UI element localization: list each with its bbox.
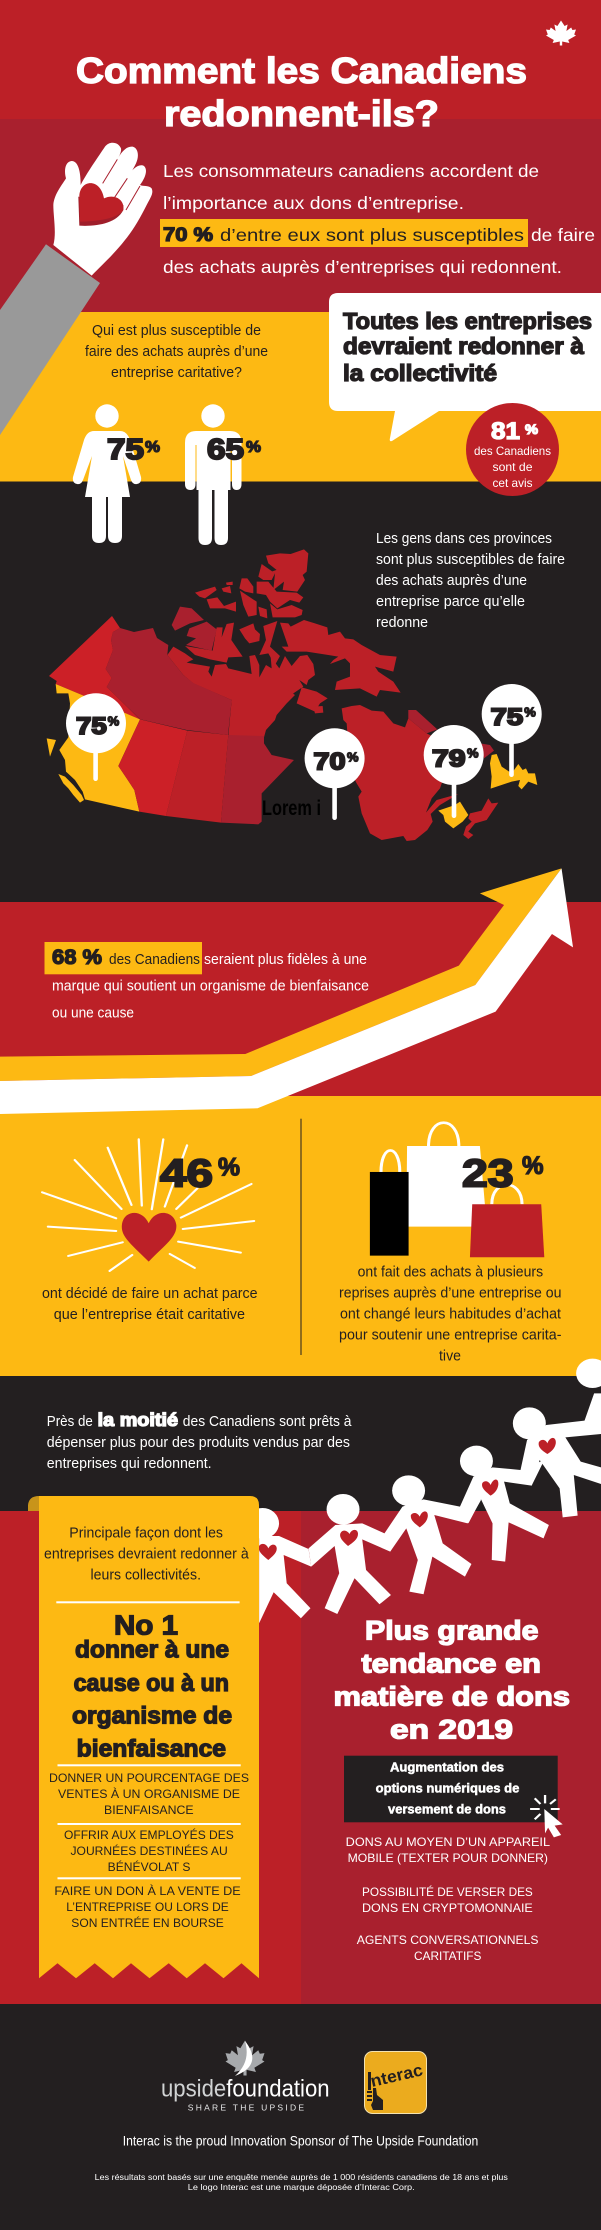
text block: la moitié: dépenser plus pour des produits vendus par des xyxy=(47,1435,350,1451)
person 6 head xyxy=(576,1359,601,1388)
stat: 23 percent: 23 xyxy=(462,1153,514,1196)
text block: intro: des achats auprès d’entreprises qui redonnent. xyxy=(163,257,562,277)
list item three: SON ENTRÉE EN BOURSE xyxy=(71,1915,224,1930)
stat: 23 percent xyxy=(462,1152,544,1196)
icon: shopping bags xyxy=(370,1123,544,1257)
text block: 46 percent description: que l’entreprise était caritative xyxy=(54,1307,245,1323)
stat: 46 percent: % xyxy=(218,1154,240,1182)
letter I and hand xyxy=(367,2072,383,2110)
callout: 81 percent circle: des Canadiens xyxy=(474,444,551,458)
label: Lorem placeholder: Lorem i xyxy=(262,797,321,820)
Nova Scotia xyxy=(463,798,498,839)
panel: red loyalty band xyxy=(0,902,601,1096)
text block: 68 percent: des Canadiens xyxy=(109,952,200,968)
panel: intro band xyxy=(0,119,601,312)
text: footnotes: Les résultats sont basés sur une enquête menée auprès de 1 000 résidents canadiens de 18 ans et plus xyxy=(95,2172,508,2182)
logo: Upside Foundation xyxy=(161,2040,330,2113)
callout: 81 percent circle xyxy=(466,403,559,496)
list item three: L’ENTREPRISE OU LORS DE xyxy=(66,1900,229,1914)
ribbon rule one xyxy=(56,1601,240,1603)
callout: digital donation options: versement de dons xyxy=(388,1802,506,1817)
panel: title band xyxy=(0,0,601,119)
text block: la moitié: la moitié xyxy=(98,1410,178,1430)
panel: dark half band xyxy=(0,1376,601,1511)
logo: Interac: nterac xyxy=(369,2060,425,2091)
text block: 23 percent description: tive xyxy=(439,1348,461,1364)
list item two: JOURNÉES DESTINÉES AU xyxy=(70,1843,228,1858)
text block: intro xyxy=(160,161,595,277)
panel: yellow stats band xyxy=(0,1096,601,1376)
title: Comment les Canadiens xyxy=(76,50,527,91)
text block: 23 percent description: pour soutenir une entreprise carita- xyxy=(339,1327,562,1343)
heading: biggest trend: tendance en xyxy=(361,1648,541,1678)
No 1 heading: cause ou à un xyxy=(74,1670,229,1697)
map pin: Maritimes 79 percent xyxy=(424,725,484,818)
panel: dark map band xyxy=(0,482,601,902)
person 1 xyxy=(246,1508,311,1623)
No 1 heading: organisme de xyxy=(72,1702,232,1729)
divider line xyxy=(300,1119,302,1355)
text block: la moitié: entreprises qui redonnent. xyxy=(47,1456,212,1472)
map pin: Maritimes 79 percent: 79 xyxy=(432,746,466,773)
map pin: Newfoundland 75 percent xyxy=(482,684,542,777)
text block: provinces: des achats auprès d’une xyxy=(376,573,527,589)
illustration: paper people chain xyxy=(246,1359,601,1623)
text block: who is more likely: faire des achats auprès d’une xyxy=(85,344,268,360)
list item two: OFFRIR AUX EMPLOYÉS DES xyxy=(64,1827,234,1842)
panel: yellow ribbon xyxy=(28,1496,259,1978)
panel: left red column xyxy=(0,1511,301,2004)
stat: women 75 percent: % xyxy=(145,439,160,456)
text block: 46 percent description: ont décidé de faire un achat parce xyxy=(42,1286,258,1302)
No 1 heading: No 1 xyxy=(114,1609,178,1640)
text: sponsor line: Interac is the proud Innovation Sponsor of The Upside Foundation xyxy=(123,2133,478,2148)
hand xyxy=(53,143,152,276)
list item two: BÉNÉVOLAT S xyxy=(108,1859,190,1874)
callout: 81 percent circle: % xyxy=(525,421,539,437)
text block: 46 percent description xyxy=(42,1286,258,1323)
callout: speech bubble: Toutes les entreprises xyxy=(343,308,592,334)
chart: map of Canada xyxy=(47,549,537,841)
text block: 68 percent: ou une cause xyxy=(52,1006,134,1022)
list item one: BIENFAISANCE xyxy=(104,1803,194,1817)
eastern provinces xyxy=(342,705,537,841)
No 1 heading: donner à une xyxy=(75,1637,229,1664)
text: footnotes xyxy=(95,2172,508,2192)
text block: provinces: Les gens dans ces provinces xyxy=(376,531,552,547)
text block: provinces: sont plus susceptibles de faire xyxy=(376,552,565,568)
text block: 23 percent description: reprises auprès d’une entreprise ou xyxy=(339,1285,562,1301)
callout: 81 percent circle: sont de xyxy=(492,460,533,474)
icon: woman figure xyxy=(73,404,141,543)
stat 68: 68 % xyxy=(52,946,102,969)
Quebec xyxy=(342,705,458,841)
ribbon intro text: Principale façon dont les xyxy=(69,1526,223,1542)
text block: who is more likely: Qui est plus susceptible de xyxy=(92,323,261,339)
Newfoundland xyxy=(490,754,537,789)
ribbon intro text: entreprises devraient redonner à xyxy=(44,1547,250,1563)
heading: biggest trend xyxy=(334,1615,570,1744)
panel: footer xyxy=(0,2004,601,2230)
icon: man figure xyxy=(185,404,242,545)
white bag xyxy=(406,1146,487,1227)
text block: trends list xyxy=(346,1835,550,1963)
text block: intro: Les consommateurs canadiens accordent de xyxy=(163,161,539,181)
south-west provinces xyxy=(47,684,294,824)
stat: men 65 percent xyxy=(207,434,261,466)
map pin: British Columbia 75 percent xyxy=(66,693,126,781)
text block: la moitié xyxy=(47,1410,352,1472)
person 4 xyxy=(460,1446,549,1562)
map pin: Ontario 70 percent: 70 xyxy=(314,748,346,775)
list item one: DONNER UN POURCENTAGE DES xyxy=(49,1771,249,1785)
text block: intro: l’importance aux dons d’entreprise. xyxy=(163,193,464,213)
ribbon intro text: leurs collectivités. xyxy=(90,1568,201,1584)
text block: intro: de faire xyxy=(531,225,595,245)
callout: speech bubble xyxy=(329,293,601,441)
Northwest Territories xyxy=(106,628,232,735)
heart xyxy=(78,197,123,226)
ribbon intro text xyxy=(44,1526,250,1584)
sleeve xyxy=(0,244,100,435)
text block: intro: d’entre eux sont plus susceptibles xyxy=(220,225,524,245)
map pin: British Columbia 75 percent: % xyxy=(108,714,120,729)
callout: digital donation options xyxy=(344,1756,558,1822)
map pin: Newfoundland 75 percent: 75 xyxy=(491,704,523,731)
map pin: Ontario 70 percent xyxy=(305,728,365,820)
stat: women 75 percent: 75 xyxy=(107,434,144,466)
New Brunswick xyxy=(438,802,468,828)
text block: trends list: CARITATIFS xyxy=(414,1949,481,1963)
list item one xyxy=(49,1771,249,1817)
heading: biggest trend: matière de dons xyxy=(334,1681,570,1711)
panel: yellow who-buys band xyxy=(0,312,601,482)
stat: 23 percent: % xyxy=(522,1152,544,1180)
person 3 xyxy=(384,1475,481,1594)
text block: provinces xyxy=(376,531,565,631)
text block: who is more likely: entreprise caritative? xyxy=(111,365,242,381)
text block: trends list: DONS EN CRYPTOMONNAIE xyxy=(362,1901,533,1915)
red bag xyxy=(492,1185,522,1204)
ribbon body xyxy=(39,1496,259,1978)
text block: 68 percent xyxy=(44,942,369,1022)
text block: 23 percent description: ont changé leurs habitudes d’achat xyxy=(340,1306,561,1322)
ribbon fold xyxy=(28,1496,39,1511)
text block: 23 percent description xyxy=(339,1265,562,1364)
black bag xyxy=(381,1150,400,1172)
text block: trends list: AGENTS CONVERSATIONNELS xyxy=(357,1933,538,1947)
text block: provinces: redonne xyxy=(376,615,428,631)
text block: 68 percent: seraient plus fidèles à une xyxy=(204,952,367,968)
text block: la moitié: des Canadiens sont prêts à xyxy=(183,1414,352,1430)
text block: trends list: POSSIBILITÉ DE VERSER DES xyxy=(362,1884,533,1899)
text block: provinces: entreprise parce qu’elle xyxy=(376,594,525,610)
Saskatchewan xyxy=(166,731,228,823)
title xyxy=(76,50,527,134)
list item one: VENTES À UN ORGANISME DE xyxy=(58,1786,240,1801)
text: footnotes: Le logo Interac est une marque déposée d’Interac Corp. xyxy=(188,2182,415,2192)
arrow: rising growth arrow xyxy=(0,868,573,1114)
stat 70: 70 % xyxy=(163,225,213,246)
list item two xyxy=(64,1827,234,1874)
ribbon rule two xyxy=(58,1764,241,1766)
Alberta xyxy=(118,719,187,816)
map pin: Ontario 70 percent: % xyxy=(347,750,359,765)
heading: biggest trend: Plus grande xyxy=(365,1615,538,1645)
callout: speech bubble: devraient redonner à xyxy=(343,333,584,359)
logo: Upside Foundation: SHARE THE UPSIDE xyxy=(188,2103,304,2113)
person 5 xyxy=(513,1393,601,1517)
callout: 81 percent circle: 81 xyxy=(491,418,520,445)
logo: Interac xyxy=(364,2052,426,2114)
map pin: Newfoundland 75 percent: % xyxy=(524,705,536,720)
text block: trends list: MOBILE (TEXTER POUR DONNER) xyxy=(348,1851,548,1865)
callout: digital donation options: options numériques de xyxy=(376,1781,519,1796)
Yukon xyxy=(49,616,140,720)
north: Nunavut and Arctic islands xyxy=(167,549,401,737)
stat: 46 percent xyxy=(160,1153,240,1196)
heading: biggest trend: en 2019 xyxy=(390,1714,513,1744)
logo leaf xyxy=(226,2040,264,2076)
text block: trends list: DONS AU MOYEN D’UN APPAREIL xyxy=(346,1835,550,1849)
highlight xyxy=(160,219,528,247)
icon: maple leaf xyxy=(546,20,576,46)
map pin: Maritimes 79 percent: % xyxy=(467,746,479,761)
stat: 46 percent: 46 xyxy=(160,1153,213,1196)
person 2 xyxy=(309,1494,404,1614)
text block: who is more likely xyxy=(85,323,268,381)
leaf swoosh xyxy=(235,2041,252,2076)
text block: 23 percent description: ont fait des achats à plusieurs xyxy=(358,1265,543,1281)
list item three xyxy=(54,1883,241,1930)
callout: digital donation options: Augmentation des xyxy=(390,1760,504,1775)
ribbon rule three xyxy=(58,1823,241,1825)
text block: 68 percent: marque qui soutient un organisme de bienfaisance xyxy=(52,979,369,995)
darker Banks and Victoria islands xyxy=(172,607,217,651)
callout: speech bubble: la collectivité xyxy=(343,360,497,386)
icon: mouse cursor click xyxy=(530,1795,563,1837)
ribbon rule four xyxy=(58,1877,241,1879)
stat: men 65 percent: 65 xyxy=(207,434,244,466)
icon: hand holding heart xyxy=(0,143,152,435)
title: redonnent-ils? xyxy=(164,93,439,134)
Manitoba xyxy=(221,735,294,824)
text block: la moitié: Près de xyxy=(47,1414,93,1430)
No 1 heading: bienfaisance xyxy=(77,1736,226,1763)
No 1 heading xyxy=(72,1609,232,1763)
British Columbia xyxy=(56,684,140,812)
logo: Upside Foundation: upsidefoundation xyxy=(161,2076,330,2103)
highlight xyxy=(44,942,202,974)
panel: right dark red column xyxy=(301,1511,601,2004)
stat: men 65 percent: % xyxy=(246,439,261,456)
callout: 81 percent circle: cet avis xyxy=(492,476,532,490)
Labrador xyxy=(408,710,437,733)
map pin: British Columbia 75 percent: 75 xyxy=(76,713,107,740)
list item three: FAIRE UN DON À LA VENTE DE xyxy=(54,1883,241,1898)
icon: heart with rays xyxy=(42,1139,254,1271)
stat: women 75 percent xyxy=(107,434,160,466)
